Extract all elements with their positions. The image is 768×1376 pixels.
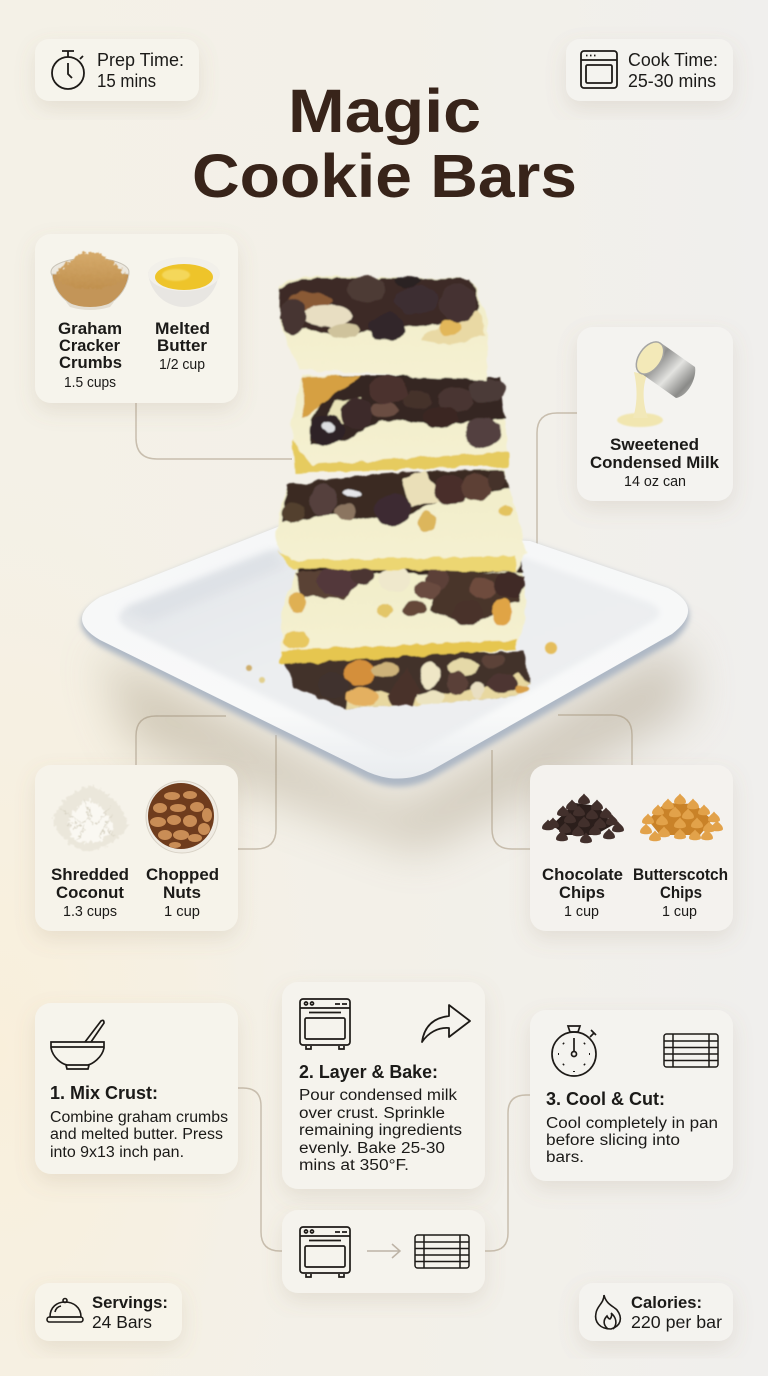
step 3 text: Cool completely in pan [546,1115,718,1132]
cook time text: Cook Time: [628,50,718,70]
panel: cook time [566,39,733,101]
icon: graham cracker crumbs bowl [51,252,129,310]
step 3 text: bars. [546,1149,584,1166]
icon: butterscotch chips [640,794,723,841]
connector lines [136,403,632,1251]
nuts text: Nuts [163,884,201,902]
graham text [58,320,122,391]
icon: melted butter bowl [148,257,220,307]
chocolate chips text: 1 cup [564,903,599,920]
step 1 text: into 9x13 inch pan. [50,1144,184,1161]
calories text [631,1293,722,1332]
butterscotch chips text [633,866,728,920]
bar 3 [277,468,527,572]
butter text: 1/2 cup [159,356,205,373]
prep time text: Prep Time: [97,50,184,70]
crumbs [246,642,557,683]
butter text: Butter [157,337,208,355]
icon: cooling rack [415,1235,469,1268]
panel: chocolate and butterscotch chips [530,765,733,931]
nuts text [146,866,219,920]
step 2 text: Pour condensed milk [299,1087,457,1104]
step 2 text: evenly. Bake 25-30 [299,1140,445,1157]
icon: flame [596,1295,620,1329]
icon: shredded coconut [53,785,128,852]
icon: chocolate chips [542,794,624,843]
cook time text: 25-30 mins [628,71,716,91]
step 2 text [299,1062,462,1174]
butter text: Melted [155,320,210,338]
step 2 text: mins at 350°F. [299,1157,409,1174]
servings text: Servings: [92,1293,168,1312]
calories text: Calories: [631,1293,702,1312]
icon: oven [581,51,617,88]
icon: mixing bowl [51,1020,104,1069]
cook time text [628,50,718,91]
panel: condensed milk [577,327,733,501]
panel: prep time [35,39,199,101]
step 1 text: 1. Mix Crust: [50,1083,158,1103]
graham text: Graham [58,320,122,338]
butterscotch chips text: Butterscotch [633,866,728,884]
prep time text [97,50,184,91]
title [192,77,577,210]
title: Magic [288,77,481,145]
panel: oven to rack [282,1210,485,1293]
panel: step 3 cool and cut [530,1010,733,1181]
coconut text: 1.3 cups [63,903,117,920]
icon: timer [552,1026,596,1076]
servings text [92,1293,168,1332]
panel: graham crumbs and butter [35,234,238,403]
nuts text: 1 cup [164,903,200,920]
chocolate chips text: Chocolate [542,866,623,884]
arrow [367,1244,400,1258]
butterscotch chips text: Chips [660,884,702,902]
coconut text: Shredded [51,866,129,884]
panel: calories [579,1283,733,1341]
icon: cloche [47,1298,83,1322]
servings text: 24 Bars [92,1312,152,1332]
condensed milk text: Sweetened [610,436,699,454]
icon: cooling rack [664,1034,718,1067]
step 3 text: before slicing into [546,1132,680,1149]
coconut text: Coconut [56,884,125,902]
icon: condensed milk can [617,337,695,427]
condensed milk text: 14 oz can [624,473,686,490]
plate shadow [100,640,690,850]
icon: oven [300,1227,350,1277]
panel: coconut and nuts [35,765,238,931]
bar 2 [292,376,508,473]
chocolate chips text [542,866,623,920]
panel: step 1 mix crust [35,1003,238,1174]
panel: step 2 layer and bake [282,982,485,1189]
bar 4 [280,560,527,664]
step 2 text: 2. Layer & Bake: [299,1062,438,1082]
step 2 text: remaining ingredients [299,1122,462,1139]
bar 1 [279,275,487,380]
plate [81,526,689,787]
icon: curved arrow [422,1005,470,1042]
title: Cookie Bars [192,142,577,210]
butterscotch chips text: 1 cup [662,903,697,920]
step 2 text: over crust. Sprinkle [299,1105,445,1122]
icon: chopped nuts bowl [146,781,218,853]
bar 5 [283,652,530,708]
step 3 text [546,1089,718,1166]
condensed milk text: Condensed Milk [590,454,720,472]
stack of cookie bars [277,275,530,708]
condensed milk text [590,436,720,490]
graham text: Crumbs [59,354,122,372]
step 3 text: 3. Cool & Cut: [546,1089,665,1109]
icon: oven [300,999,350,1049]
coconut text [51,866,129,920]
step 1 text: and melted butter. Press [50,1126,223,1143]
graham text: 1.5 cups [64,374,116,391]
calories text: 220 per bar [631,1312,722,1332]
icon: stopwatch [52,51,84,89]
butter text [155,320,210,373]
chocolate chips text: Chips [559,884,605,902]
panel: servings [35,1283,182,1341]
graham text: Cracker [59,337,121,355]
nuts text: Chopped [146,866,219,884]
prep time text: 15 mins [97,71,156,91]
step 1 text [50,1083,228,1161]
step 1 text: Combine graham crumbs [50,1109,228,1126]
